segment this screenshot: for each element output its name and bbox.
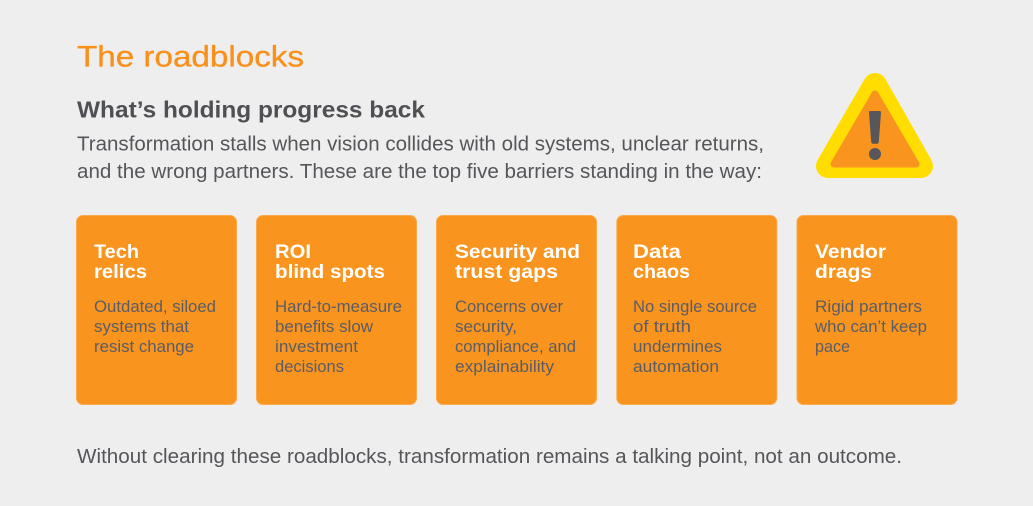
panel: vendor drags: drags [815, 262, 872, 283]
intro text [77, 134, 764, 183]
panel: data chaos: chaos [633, 262, 690, 283]
intro text: Transformation stalls when vision collides with old systems, unclear returns, [77, 134, 764, 156]
panel: vendor drags: pace [815, 338, 850, 356]
intro text: and the wrong partners. These are the top five barriers standing in the way: [77, 161, 762, 183]
panel: ROI blind spots: Hard-to-measure [275, 298, 402, 316]
panel: security and trust gaps: Concerns over [455, 298, 563, 316]
panel: ROI blind spots: decisions [275, 358, 344, 376]
panel: ROI blind spots: investment [275, 338, 358, 356]
panel: security and trust gaps: explainability [455, 358, 555, 376]
panel: security and trust gaps: Security and [455, 242, 580, 263]
icon: warning triangle [828, 85, 921, 166]
panel: ROI blind spots [256, 216, 416, 404]
panel: security and trust gaps: trust gaps [455, 262, 558, 283]
panel: data chaos: undermines [633, 338, 722, 356]
panel: tech relics: systems that [94, 318, 189, 336]
panel: security and trust gaps: security, [455, 318, 517, 336]
panel: vendor drags [797, 216, 957, 404]
panel: ROI blind spots: blind spots [275, 262, 385, 283]
panel: data chaos: Data [633, 242, 681, 263]
panel: data chaos [617, 216, 777, 404]
panel: vendor drags: Rigid partners [815, 298, 922, 316]
panel: data chaos: of truth [633, 318, 691, 336]
panel: tech relics [76, 216, 236, 404]
panel: data chaos: automation [633, 358, 719, 376]
panel: tech relics: resist change [94, 338, 194, 356]
panel: ROI blind spots: benefits slow [275, 318, 373, 336]
panel: tech relics: Tech [94, 242, 139, 263]
panel: security and trust gaps [436, 216, 596, 404]
subheading: What’s holding progress back [77, 96, 425, 122]
panel: tech relics: Outdated, siloed [94, 298, 216, 316]
title: The roadblocks [77, 40, 304, 74]
panel: tech relics: relics [94, 262, 147, 283]
panel: security and trust gaps: compliance, and [455, 338, 576, 356]
panel: vendor drags: who can’t keep [814, 318, 927, 336]
panel: ROI blind spots: ROI [275, 242, 311, 263]
closing statement: Without clearing these roadblocks, transformation remains a talking point, not an outcome. [77, 446, 902, 468]
panel: vendor drags: Vendor [815, 242, 887, 263]
panel: data chaos: No single source [633, 298, 757, 316]
